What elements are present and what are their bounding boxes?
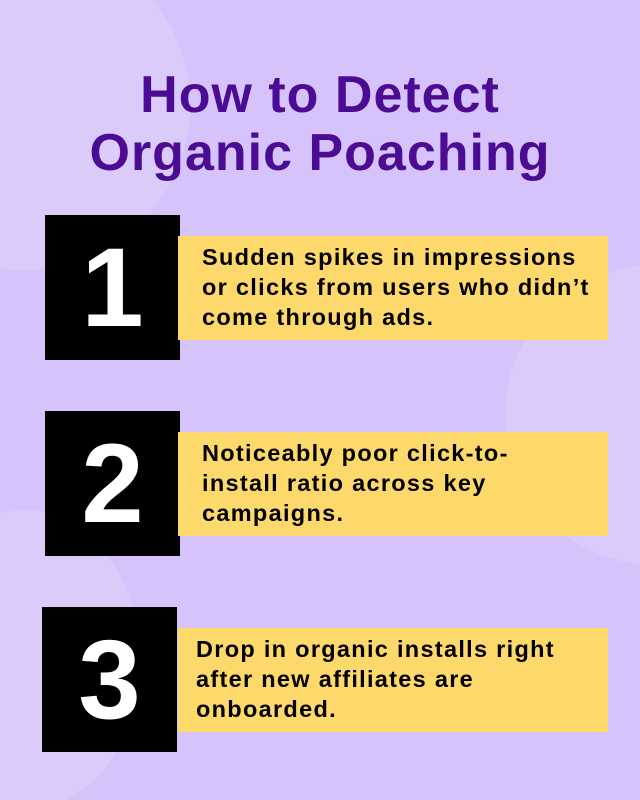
number box 1: 1 <box>81 225 144 350</box>
number box 2 <box>45 411 180 556</box>
step 2 <box>45 411 608 556</box>
number box 3 <box>42 607 177 752</box>
title: Organic Poaching <box>90 124 550 182</box>
number box 1 <box>45 215 180 360</box>
title: How to Detect <box>140 66 500 124</box>
text bar 3 <box>178 628 608 732</box>
title <box>90 66 550 182</box>
number box 3: 3 <box>78 617 141 742</box>
text bar 1: come through ads. <box>202 304 434 330</box>
text bar 3: onboarded. <box>196 696 337 722</box>
text bar 1: Sudden spikes in impressions <box>202 244 577 270</box>
text bar 3: after new affiliates are <box>196 666 474 692</box>
step 1 <box>45 215 608 360</box>
text bar 2: Noticeably poor click-to- <box>202 440 509 466</box>
text bar 2 <box>178 432 608 536</box>
text bar 3: Drop in organic installs right <box>196 636 555 662</box>
number box 2: 2 <box>81 421 144 546</box>
text bar 1 <box>178 236 608 340</box>
text bar 2: install ratio across key <box>202 470 487 496</box>
text bar 1: or clicks from users who didn’t <box>202 274 590 300</box>
text bar 2: campaigns. <box>202 500 344 526</box>
step 3 <box>42 607 608 752</box>
